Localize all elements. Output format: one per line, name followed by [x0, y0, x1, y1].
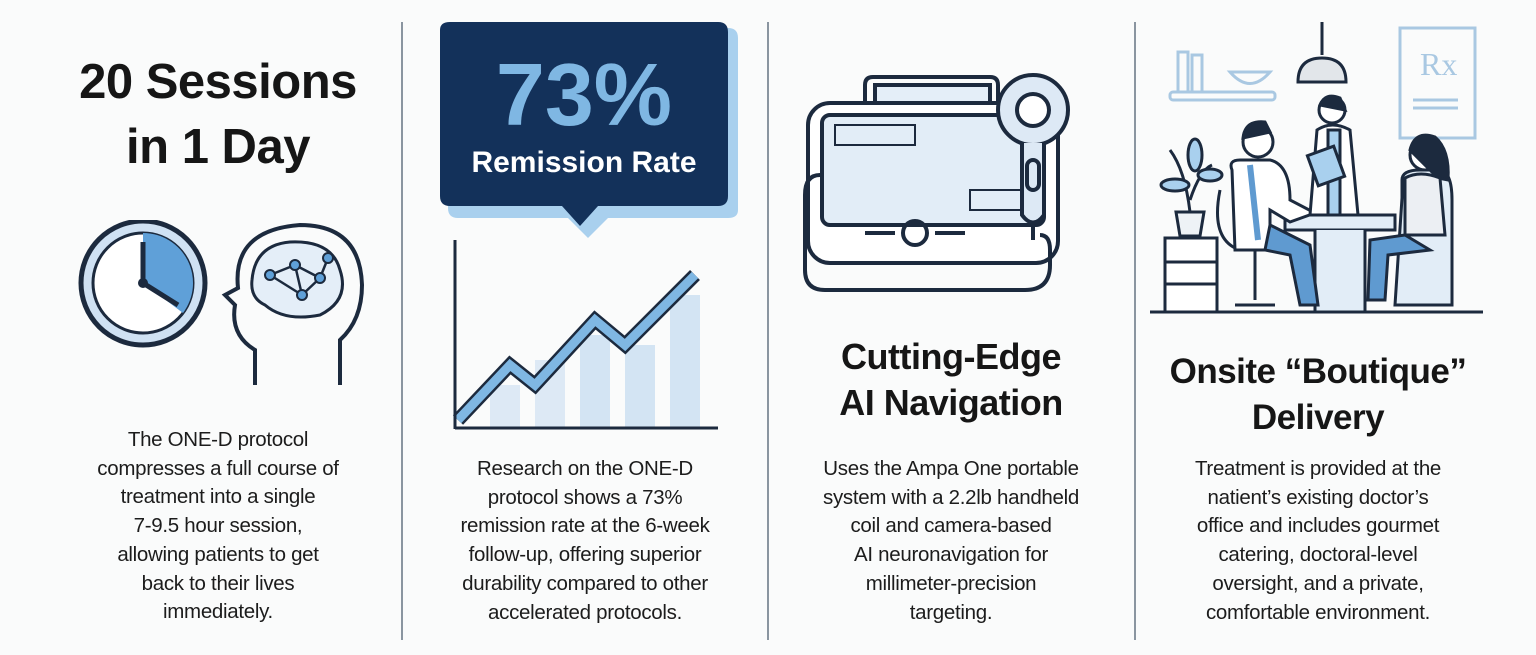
body text col 2: protocol shows a 73% — [488, 486, 682, 509]
body text col 1: back to their lives — [142, 572, 294, 595]
body text col 1: The ONE-D protocol — [128, 428, 308, 451]
body text col 4 — [1195, 457, 1441, 624]
body text col 4: oversight, and a private, — [1212, 572, 1424, 595]
heading: boutique delivery: Onsite “Boutique” — [1170, 352, 1466, 391]
body text col 1: compresses a full course of — [97, 457, 339, 480]
body text col 4: natient’s existing doctor’s — [1208, 486, 1428, 509]
body text col 1 — [97, 428, 339, 623]
heading: AI navigation: Cutting-Edge — [841, 336, 1061, 377]
body text col 3: Uses the Ampa One portable — [823, 457, 1079, 480]
body text col 1: allowing patients to get — [117, 543, 319, 566]
body text col 3 — [823, 457, 1079, 624]
body text col 4: office and includes gourmet — [1197, 514, 1439, 537]
body text col 1: treatment into a single — [121, 485, 315, 508]
heading: AI navigation — [839, 336, 1063, 423]
body text col 3: targeting. — [910, 601, 992, 624]
body text col 3: millimeter-precision — [866, 572, 1036, 595]
body text col 3: coil and camera-based — [850, 514, 1052, 537]
body text col 1: 7-9.5 hour session, — [134, 514, 302, 537]
heading: 20 sessions: 20 Sessions — [79, 55, 357, 109]
illustration: doctor office: Rx — [1420, 46, 1457, 82]
icon: clock and brain head — [78, 220, 364, 385]
body text col 3: system with a 2.2lb handheld — [823, 486, 1079, 509]
callout: 73% remission rate — [440, 22, 738, 238]
body text col 4: comfortable environment. — [1206, 601, 1430, 624]
body text col 2: remission rate at the 6-week — [460, 514, 710, 537]
icon: portable device with coil — [803, 73, 1070, 292]
body text col 3: AI neuronavigation for — [854, 543, 1048, 566]
body text col 2: Research on the ONE-D — [477, 457, 693, 480]
heading: 20 sessions — [79, 55, 357, 174]
body text col 2: follow-up, offering superior — [469, 543, 701, 566]
body text col 1: immediately. — [163, 600, 273, 623]
illustration: doctor office — [1150, 22, 1483, 314]
body text col 4: Treatment is provided at the — [1195, 457, 1441, 480]
heading: AI navigation: AI Navigation — [839, 382, 1063, 423]
body text col 2: durability compared to other — [462, 572, 708, 595]
callout: 73% remission rate: Remission Rate — [471, 146, 697, 179]
heading: boutique delivery: Delivery — [1252, 398, 1384, 437]
body text col 4: catering, doctoral-level — [1218, 543, 1418, 566]
body text col 2: accelerated protocols. — [488, 601, 682, 624]
body text col 2 — [460, 457, 710, 624]
callout: 73% remission rate: 73% — [496, 45, 672, 144]
chart: rising line — [453, 240, 718, 430]
heading: 20 sessions: in 1 Day — [126, 120, 310, 174]
heading: boutique delivery — [1170, 352, 1466, 437]
